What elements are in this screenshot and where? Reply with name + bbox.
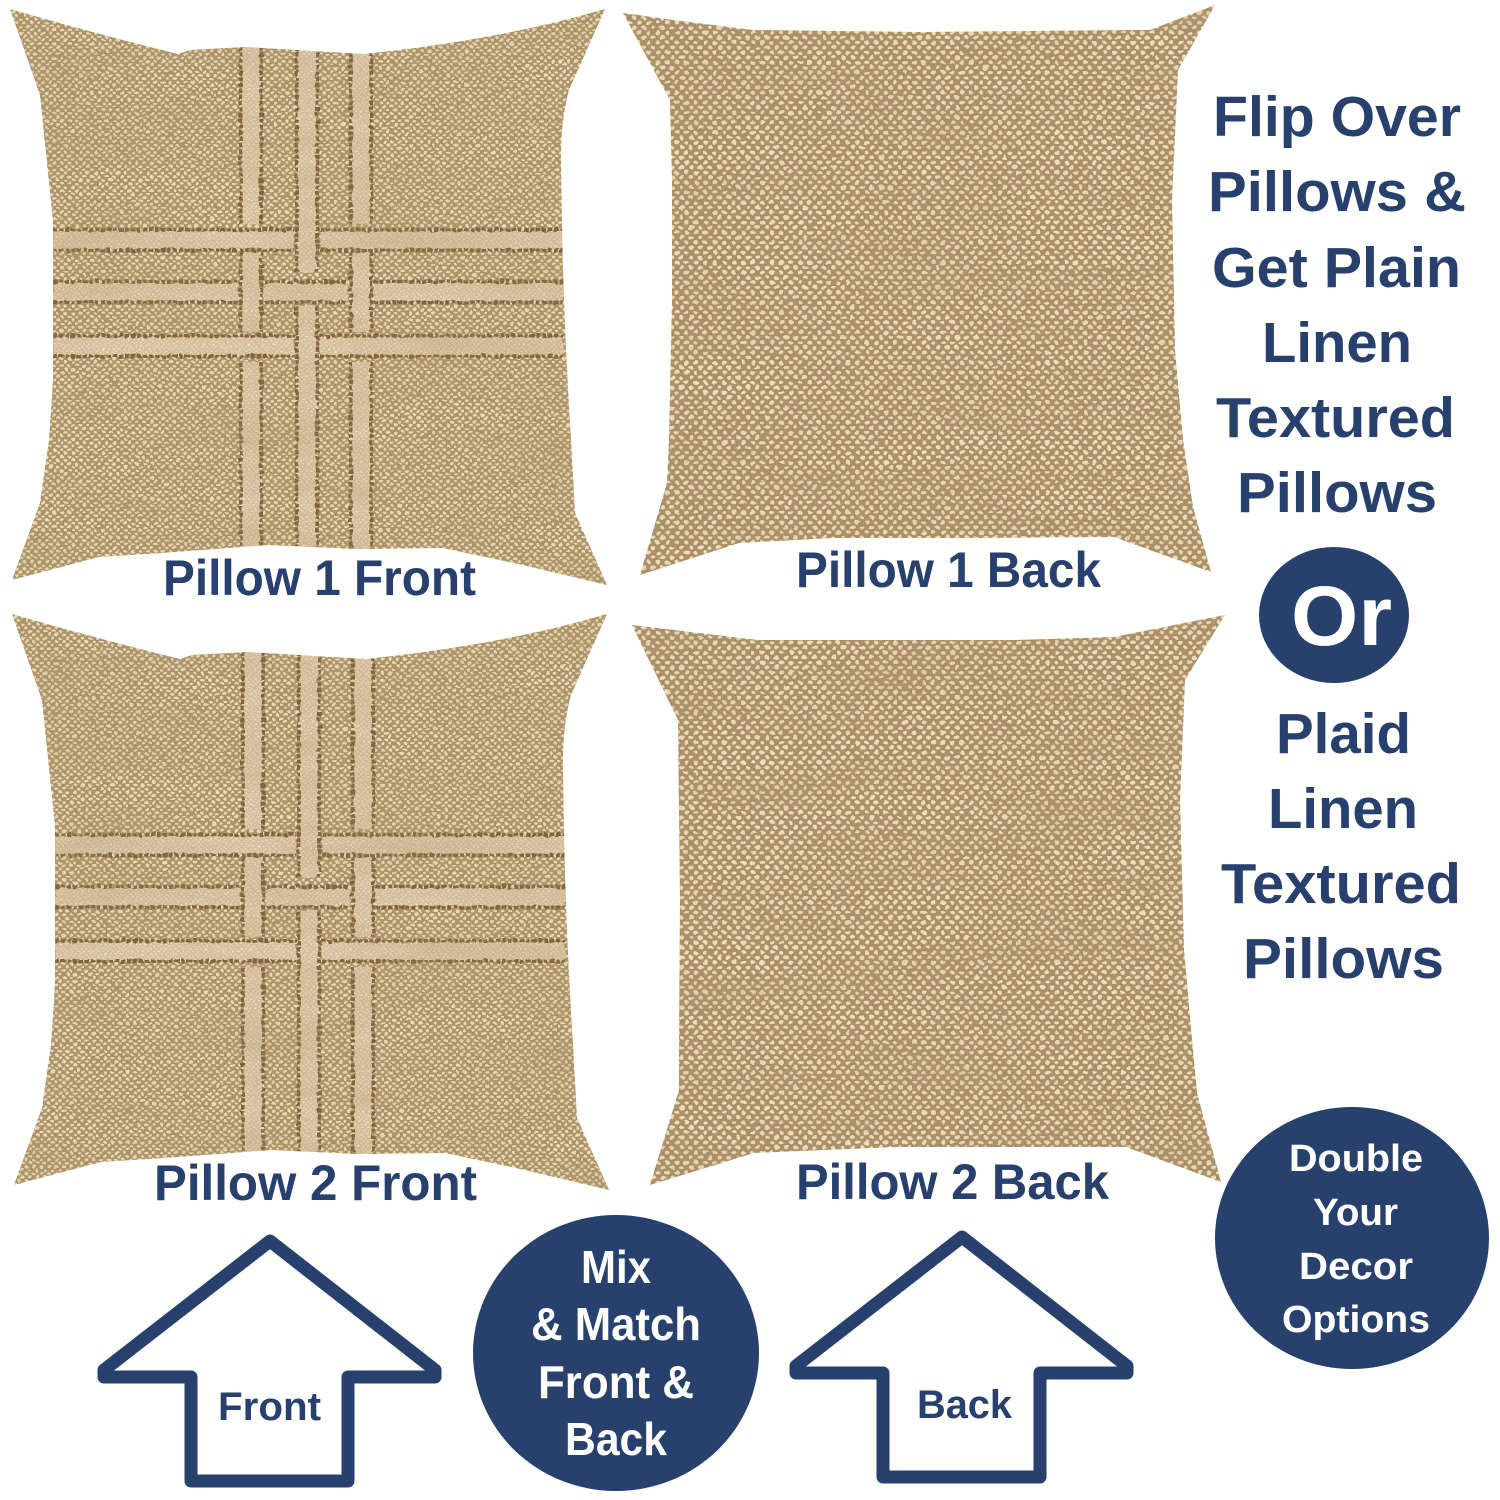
heading: flip over pillows: Get Plain — [1212, 236, 1461, 300]
pillow 2 back — [620, 605, 1240, 1200]
badge: mix and match — [473, 1215, 759, 1491]
label: pillow 2 front: Pillow 2 Front — [154, 1155, 477, 1211]
arrow: front — [104, 1241, 435, 1481]
pillow 1 front — [0, 0, 620, 600]
badge: double your decor options — [1215, 1107, 1489, 1369]
badge: mix and match: Mix — [581, 1241, 651, 1293]
label: pillow 2 back: Pillow 2 Back — [796, 1154, 1109, 1210]
heading: plaid linen textured pillows: Textured — [1221, 852, 1461, 916]
heading: flip over pillows: Pillows & — [1208, 160, 1466, 224]
arrow: back — [796, 1237, 1127, 1477]
heading: plaid linen textured pillows: Pillows — [1243, 927, 1444, 991]
heading: flip over pillows — [1208, 85, 1466, 525]
badge: or: Or — [1291, 569, 1392, 663]
label: pillow 1 front: Pillow 1 Front — [163, 550, 476, 606]
heading: flip over pillows: Flip Over — [1213, 85, 1461, 149]
badge: double your decor options: Decor — [1299, 1246, 1413, 1288]
badge: mix and match: Back — [565, 1413, 667, 1465]
badge: mix and match: Front & — [538, 1356, 694, 1408]
pillow 2 front — [2, 605, 622, 1205]
heading: plaid linen textured pillows: Plaid — [1276, 702, 1411, 766]
badge: double your decor options: Your — [1313, 1192, 1398, 1234]
arrow: back: Back — [917, 1383, 1013, 1427]
heading: plaid linen textured pillows — [1221, 702, 1461, 991]
badge: double your decor options: Double — [1289, 1138, 1423, 1180]
heading: plaid linen textured pillows: Linen — [1268, 777, 1418, 841]
heading: flip over pillows: Textured — [1216, 386, 1455, 450]
heading: flip over pillows: Linen — [1262, 311, 1412, 375]
arrow: front: Front — [218, 1385, 321, 1429]
badge: or — [1259, 547, 1409, 683]
heading: flip over pillows: Pillows — [1237, 461, 1437, 525]
badge: double your decor options: Options — [1282, 1299, 1430, 1341]
label: pillow 1 back: Pillow 1 Back — [796, 542, 1101, 598]
badge: mix and match: & Match — [531, 1298, 701, 1350]
pillow 1 back — [610, 0, 1230, 590]
